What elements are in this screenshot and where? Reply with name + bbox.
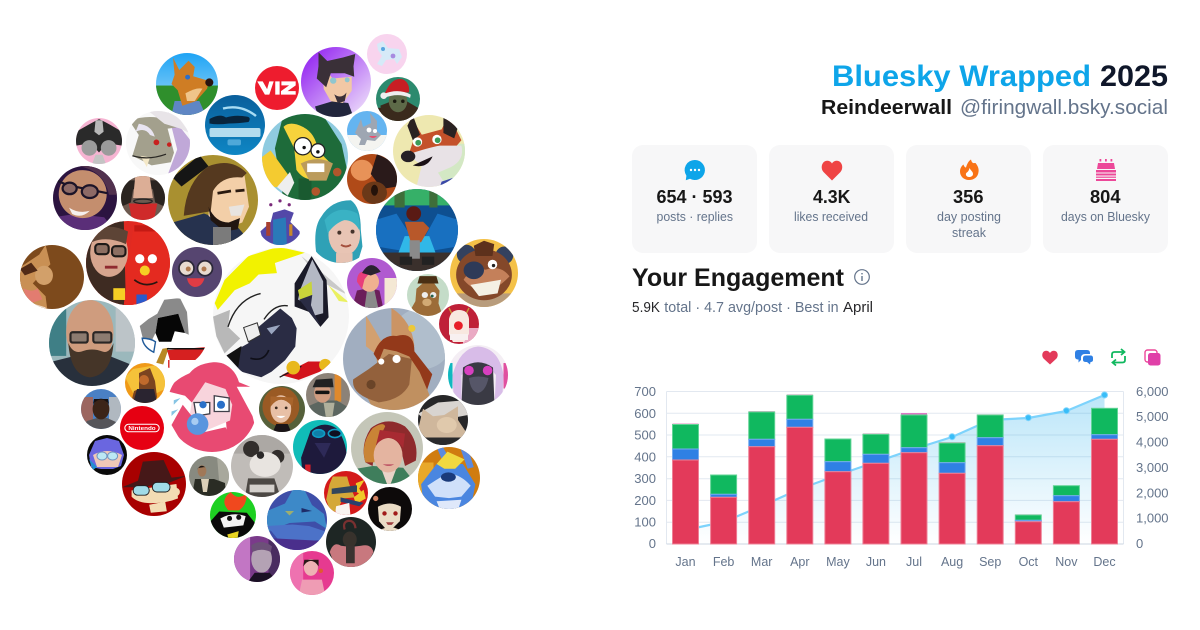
avatar: viz logo <box>255 66 299 110</box>
left axis labels: 700 <box>634 384 656 399</box>
avatar: blurred dark and orange photo <box>347 154 397 204</box>
icon: quotes copies <box>1145 350 1160 366</box>
stat card: day posting streak: streak <box>952 226 987 240</box>
bar: May <box>825 439 851 544</box>
user name and handle: @firingwall.bsky.social <box>960 97 1168 119</box>
icon: heart <box>822 161 842 180</box>
avatar: bearded man on couch <box>189 456 229 496</box>
icon: info <box>855 270 869 284</box>
stat card: days on Bluesky: days on Bluesky <box>1061 210 1151 224</box>
bar: February <box>711 475 737 544</box>
bar: December <box>1092 408 1118 544</box>
bar: October <box>1015 514 1041 544</box>
avatar: teal-haired woman <box>315 200 362 263</box>
avatar: simpsons homer as tree <box>262 114 348 200</box>
avatar: red clown santa <box>439 304 479 344</box>
legend icons <box>1042 349 1160 366</box>
month labels: Jan <box>675 555 696 569</box>
engagement summary: 5.9K <box>632 300 660 316</box>
avatar: nintendo logo <box>120 406 164 450</box>
avatar: black-haired goth girl <box>368 487 412 531</box>
left axis labels <box>634 384 656 551</box>
bar: March <box>749 411 775 544</box>
stat card: posts and replies: 654 · 593 <box>656 187 732 207</box>
avatar: disney prime video logo <box>205 95 265 155</box>
engagement summary: April <box>843 300 873 316</box>
bar: July <box>901 413 927 544</box>
avatar: grey wolf cartoon <box>347 111 387 151</box>
avatar: man with hat and sunglasses <box>306 373 350 417</box>
avatar: horse <box>343 308 453 410</box>
avatar: grey and white dragon <box>132 111 190 174</box>
month labels: Feb <box>713 555 734 569</box>
avatar: purple and blue dragon <box>260 199 300 245</box>
stat card: posts and replies: posts · replies <box>656 210 733 224</box>
avatar: curly-haired woman <box>259 386 305 432</box>
stat card: day posting streak: 356 <box>953 187 984 207</box>
avatar: black and pink cat <box>76 118 122 164</box>
avatar: dark-haired man illustration <box>301 47 371 117</box>
icon: birthday cake <box>1096 159 1116 181</box>
right axis labels: 1,000 <box>1136 510 1169 526</box>
engagement summary: total · 4.7 avg/post · Best in <box>664 300 839 316</box>
avatar: upside down red-haired person <box>121 176 165 220</box>
avatar: purple creature with glasses <box>172 247 222 297</box>
month labels: Dec <box>1093 555 1116 569</box>
left axis labels: 500 <box>634 428 656 442</box>
avatar: long-haired bearded man illustration <box>168 155 258 245</box>
title: Bluesky Wrapped <box>832 60 1091 93</box>
left axis labels: 600 <box>634 406 656 421</box>
month labels: Jul <box>906 555 922 569</box>
avatar: beaver with glasses <box>407 274 449 316</box>
avatar: blue-haired goggles character <box>87 435 127 475</box>
right axis labels: 4,000 <box>1136 434 1169 450</box>
right axis labels: 2,000 <box>1136 486 1169 500</box>
stat card: posts and replies <box>632 145 757 253</box>
avatar: purple-haired dark creature <box>448 345 508 405</box>
month labels: Apr <box>790 555 810 569</box>
cumulative area and line <box>686 392 1108 544</box>
avatar: blue and white bunny <box>418 447 480 509</box>
title: 2025 <box>1100 60 1168 93</box>
avatar: smiling man in glasses <box>53 165 117 230</box>
stat card: days on Bluesky: 804 <box>1090 187 1120 207</box>
left axis labels: 0 <box>649 536 656 551</box>
avatar: santa zombie <box>376 77 420 121</box>
month labels: Aug <box>941 555 963 569</box>
stat card: day posting streak: day posting <box>937 210 1001 224</box>
avatar: blue dragon face <box>267 490 327 550</box>
avatar: purple-lit man <box>234 536 280 582</box>
stat card: likes received: 4.3K <box>813 187 850 207</box>
month labels: Mar <box>751 555 772 569</box>
right axis labels <box>1136 384 1169 551</box>
avatar: white wolf with yellow lightning <box>213 247 349 384</box>
month labels <box>675 555 1116 569</box>
month labels: Nov <box>1055 555 1078 569</box>
right axis labels: 6,000 <box>1136 384 1169 399</box>
stat card: days on Bluesky <box>1043 145 1168 253</box>
avatar: dark horned creature in pink <box>326 517 376 567</box>
avatar: pink-haired character blowing bubble gum <box>167 362 257 452</box>
stat card: day posting streak <box>906 145 1031 253</box>
stat card: likes received: likes received <box>794 210 868 224</box>
avatar: sleeping cream cat <box>418 395 468 445</box>
bar: September <box>977 414 1003 544</box>
avatar cluster <box>20 34 518 595</box>
stacked bars <box>672 394 1118 544</box>
combo chart <box>634 384 1169 569</box>
avatar: cartoon wolf <box>156 53 218 115</box>
avatar: soviet flag bird <box>324 471 368 515</box>
bar: June <box>863 433 889 544</box>
avatar: brown dog <box>20 245 84 309</box>
month labels: Sep <box>979 555 1001 569</box>
avatar: woman with red mascot <box>86 221 170 305</box>
avatar: brown bear <box>450 239 518 307</box>
avatar: bald bearded man <box>49 300 135 386</box>
plot grid <box>666 392 1124 544</box>
avatar: nintendo logo: Nintendo <box>128 426 156 432</box>
avatar: blue monsters on stage <box>376 189 458 271</box>
user name and handle <box>821 97 1168 119</box>
left axis labels: 100 <box>634 514 656 530</box>
icon: flame <box>960 160 979 180</box>
bar: January <box>672 423 698 544</box>
icon: likes heart <box>1042 351 1058 364</box>
left axis labels: 300 <box>634 471 656 486</box>
avatar: darth vader with glasses <box>293 420 347 474</box>
left axis labels: 200 <box>634 493 656 508</box>
right axis labels: 0 <box>1136 536 1143 551</box>
stat card: likes received <box>769 145 894 253</box>
month labels: May <box>826 555 850 569</box>
month labels: Jun <box>866 555 886 569</box>
left axis labels: 400 <box>634 450 656 464</box>
avatar: green and black cat <box>210 492 256 538</box>
avatar: mickey mouse sketch <box>231 435 293 497</box>
avatar: black man in grey hoodie <box>81 389 121 429</box>
right axis labels: 5,000 <box>1136 409 1169 424</box>
avatar: pink hat character <box>347 258 397 308</box>
bar: August <box>939 442 965 544</box>
avatar: pink-toned man <box>290 551 334 595</box>
right axis labels: 3,000 <box>1136 460 1169 475</box>
user name and handle: Reindeerwall <box>821 97 952 119</box>
avatar: red-haired woman <box>351 412 423 484</box>
month labels: Oct <box>1019 555 1039 569</box>
icon: reposts arrows <box>1112 349 1125 366</box>
avatar: hooded figure at piano <box>138 298 208 368</box>
avatar: fire figure <box>125 363 165 403</box>
avatar: red background fedora character <box>122 452 186 516</box>
icon: chat bubble <box>685 160 705 180</box>
icon: replies bubbles <box>1075 350 1093 364</box>
heading: your engagement: Your Engagement <box>632 264 845 292</box>
avatar: cartoon fox <box>393 115 465 187</box>
avatar: pink pony <box>367 34 407 74</box>
bar: November <box>1053 486 1079 544</box>
bar: April <box>787 394 813 544</box>
